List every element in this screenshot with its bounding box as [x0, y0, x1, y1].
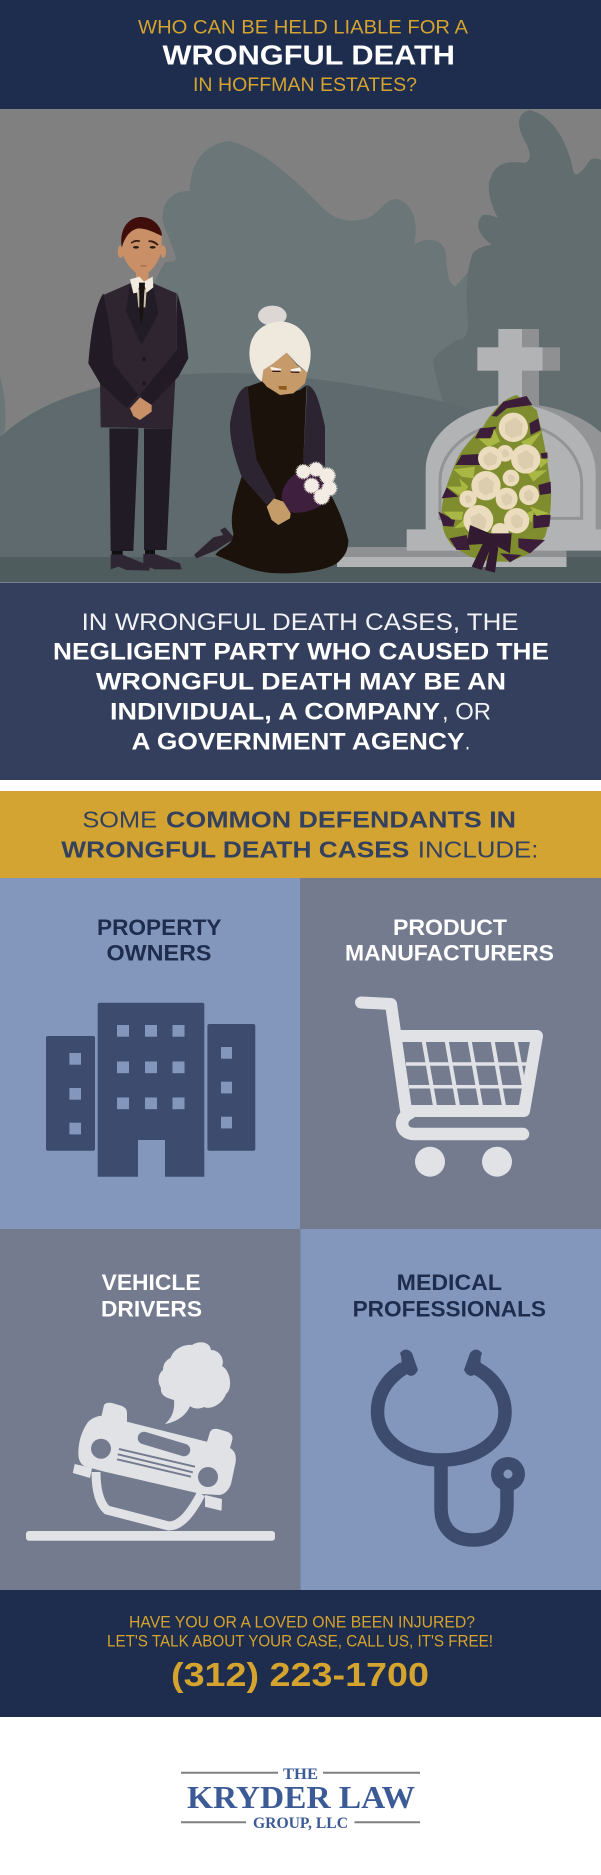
left edge bush — [0, 377, 6, 438]
leaves — [443, 428, 550, 528]
call to action footer — [0, 1590, 601, 1717]
title line 2: WRONGFUL DEATH — [162, 39, 455, 70]
header banner — [0, 0, 601, 109]
prompt text: LET'S TALK ABOUT YOUR CASE, CALL US, IT'S FREE! — [107, 1632, 493, 1650]
line 1: IN WRONGFUL DEATH CASES, THE — [82, 609, 519, 636]
logo: The Kryder Law Group: THE — [283, 1766, 318, 1783]
line 4: , OR — [442, 699, 491, 726]
phone number: (312) 223-1700 — [171, 1656, 429, 1693]
hill — [0, 373, 601, 560]
title line 1: WHO CAN BE HELD LIABLE FOR A — [138, 17, 468, 38]
panel: product manufacturers — [300, 878, 601, 1229]
gravestone — [337, 329, 601, 567]
logo: The Kryder Law Group: GROUP, LLC — [253, 1815, 348, 1832]
label: MANUFACTURERS — [345, 940, 554, 965]
label: VEHICLE — [102, 1270, 201, 1295]
logo: The Kryder Law Group: KRYDER LAW — [187, 1779, 415, 1815]
logo: The Kryder Law Group — [181, 1766, 420, 1832]
label — [345, 915, 554, 965]
man in suit — [88, 217, 188, 571]
label: PROPERTY — [97, 915, 222, 940]
illustration: cemetery scene — [0, 109, 601, 583]
prompt text — [107, 1613, 493, 1650]
line 3: WRONGFUL DEATH MAY BE AN — [96, 668, 506, 696]
line 4: INDIVIDUAL, A COMPANY — [110, 699, 440, 726]
panel: vehicle drivers — [0, 1229, 300, 1590]
prompt text: HAVE YOU OR A LOVED ONE BEEN INJURED? — [129, 1613, 475, 1631]
background bush, right — [433, 110, 601, 480]
heading line 2: WRONGFUL DEATH CASES — [61, 836, 409, 862]
label: PRODUCT — [393, 915, 508, 940]
background bush, middle — [130, 141, 601, 480]
gold heading banner — [0, 791, 601, 878]
roses — [459, 413, 540, 540]
heading line 1: SOME — [82, 806, 157, 832]
panel: property owners — [0, 878, 300, 1229]
info panel — [0, 583, 601, 780]
ground — [0, 557, 601, 582]
icon: stethoscope — [378, 1350, 525, 1540]
label — [97, 915, 222, 965]
funeral wreath — [438, 395, 551, 573]
icon: overturned car with smoke — [26, 1342, 275, 1541]
label: PROFESSIONALS — [353, 1297, 546, 1322]
label: MEDICAL — [397, 1270, 502, 1295]
line 5: . — [465, 729, 470, 756]
icon: shopping cart — [361, 1002, 537, 1177]
title line 3: IN HOFFMAN ESTATES? — [193, 75, 417, 96]
line 2: NEGLIGENT PARTY WHO CAUSED THE — [53, 638, 549, 666]
label: OWNERS — [106, 940, 212, 965]
line 5: A GOVERNMENT AGENCY — [132, 729, 465, 756]
label — [101, 1270, 202, 1322]
heading line 1: COMMON DEFENDANTS IN — [166, 806, 516, 832]
bow — [467, 525, 512, 573]
heading line 2: INCLUDE: — [418, 836, 538, 862]
icon: office buildings — [46, 1003, 255, 1177]
heading line 2 — [61, 836, 539, 862]
kneeling elderly woman — [194, 306, 348, 573]
panel: medical professionals — [300, 1229, 601, 1590]
ribbon stripes — [438, 396, 551, 562]
label — [353, 1270, 546, 1322]
label: DRIVERS — [101, 1297, 202, 1322]
